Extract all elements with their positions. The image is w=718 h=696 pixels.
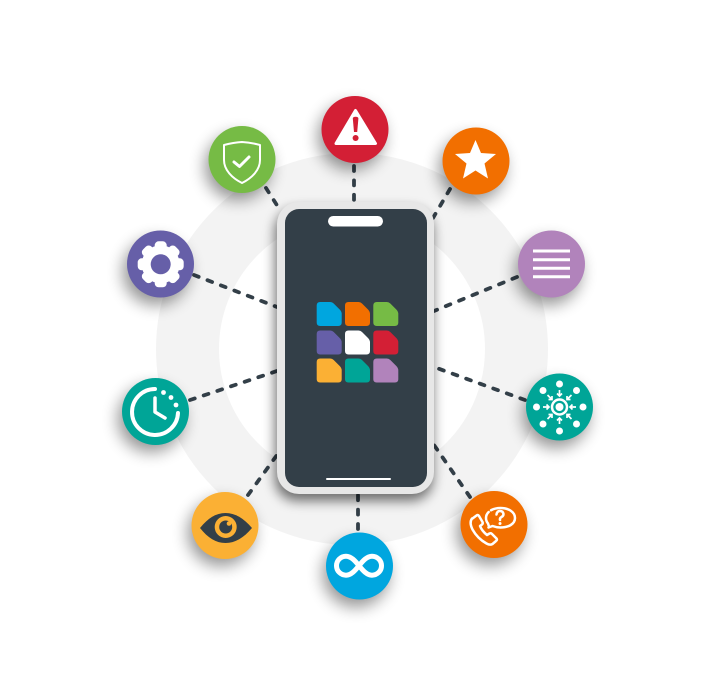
icon: eye bbox=[188, 492, 258, 566]
icon: star bbox=[439, 128, 510, 202]
icon: converging network bbox=[523, 374, 593, 448]
icon: infinity bbox=[323, 532, 393, 607]
phone bbox=[275, 202, 434, 501]
phone body bbox=[277, 202, 434, 494]
icon: shield check bbox=[205, 126, 276, 200]
icon: menu lines bbox=[515, 230, 585, 305]
icon: gear bbox=[123, 230, 194, 305]
icon: clock bbox=[118, 378, 189, 452]
icon: phone call question bbox=[457, 491, 528, 565]
app file grid bbox=[317, 302, 398, 382]
phone notch bbox=[328, 216, 383, 226]
background ring bbox=[188, 184, 516, 514]
phone screen bbox=[285, 209, 427, 487]
icon: warning triangle bbox=[318, 96, 388, 170]
phone home bar bbox=[326, 478, 391, 480]
dashed connectors bbox=[190, 166, 525, 529]
